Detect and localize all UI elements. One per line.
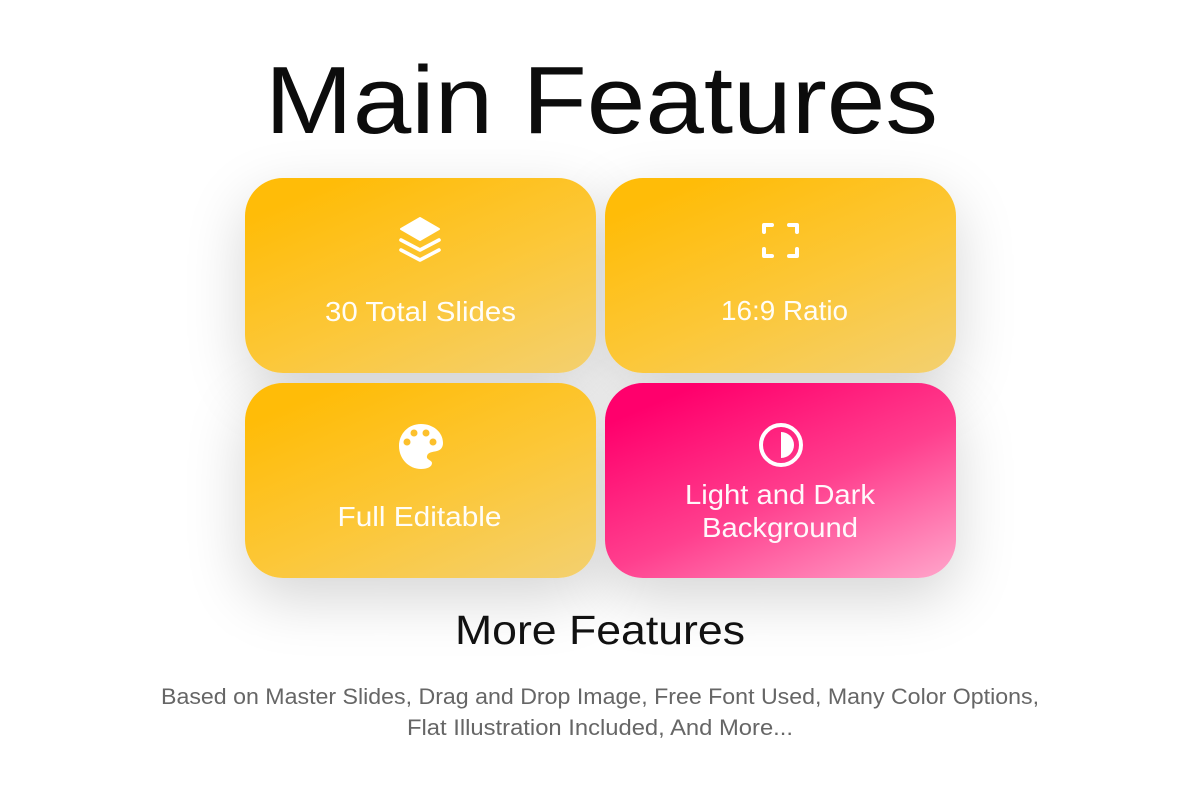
heading: more features: More Features (455, 607, 745, 653)
icon: contrast circle (761, 425, 801, 465)
label: full editable: Full Editable (338, 501, 502, 532)
title: Main Features (265, 47, 938, 154)
label: 16:9 ratio: 16:9 Ratio (721, 295, 848, 326)
panel: light and dark background (605, 383, 956, 578)
icon: layers (401, 218, 439, 260)
text block: feature list: Based on Master Slides, Drag and Drop Image, Free Font Used, Many Color Options, (161, 684, 1039, 709)
label: 30 total slides: 30 Total Slides (325, 296, 516, 327)
icon: palette (399, 424, 443, 469)
panel: 30 total slides (245, 178, 596, 373)
panel: 16:9 ratio (605, 178, 956, 373)
label: light and dark background (685, 479, 876, 543)
icon: frame corners (764, 225, 797, 256)
text block: feature list: Flat Illustration Included, And More... (407, 715, 793, 740)
label: light and dark background: Light and Dark (685, 479, 876, 510)
label: light and dark background: Background (702, 512, 858, 543)
text block: feature list (161, 684, 1039, 740)
panel: full editable (245, 383, 596, 578)
